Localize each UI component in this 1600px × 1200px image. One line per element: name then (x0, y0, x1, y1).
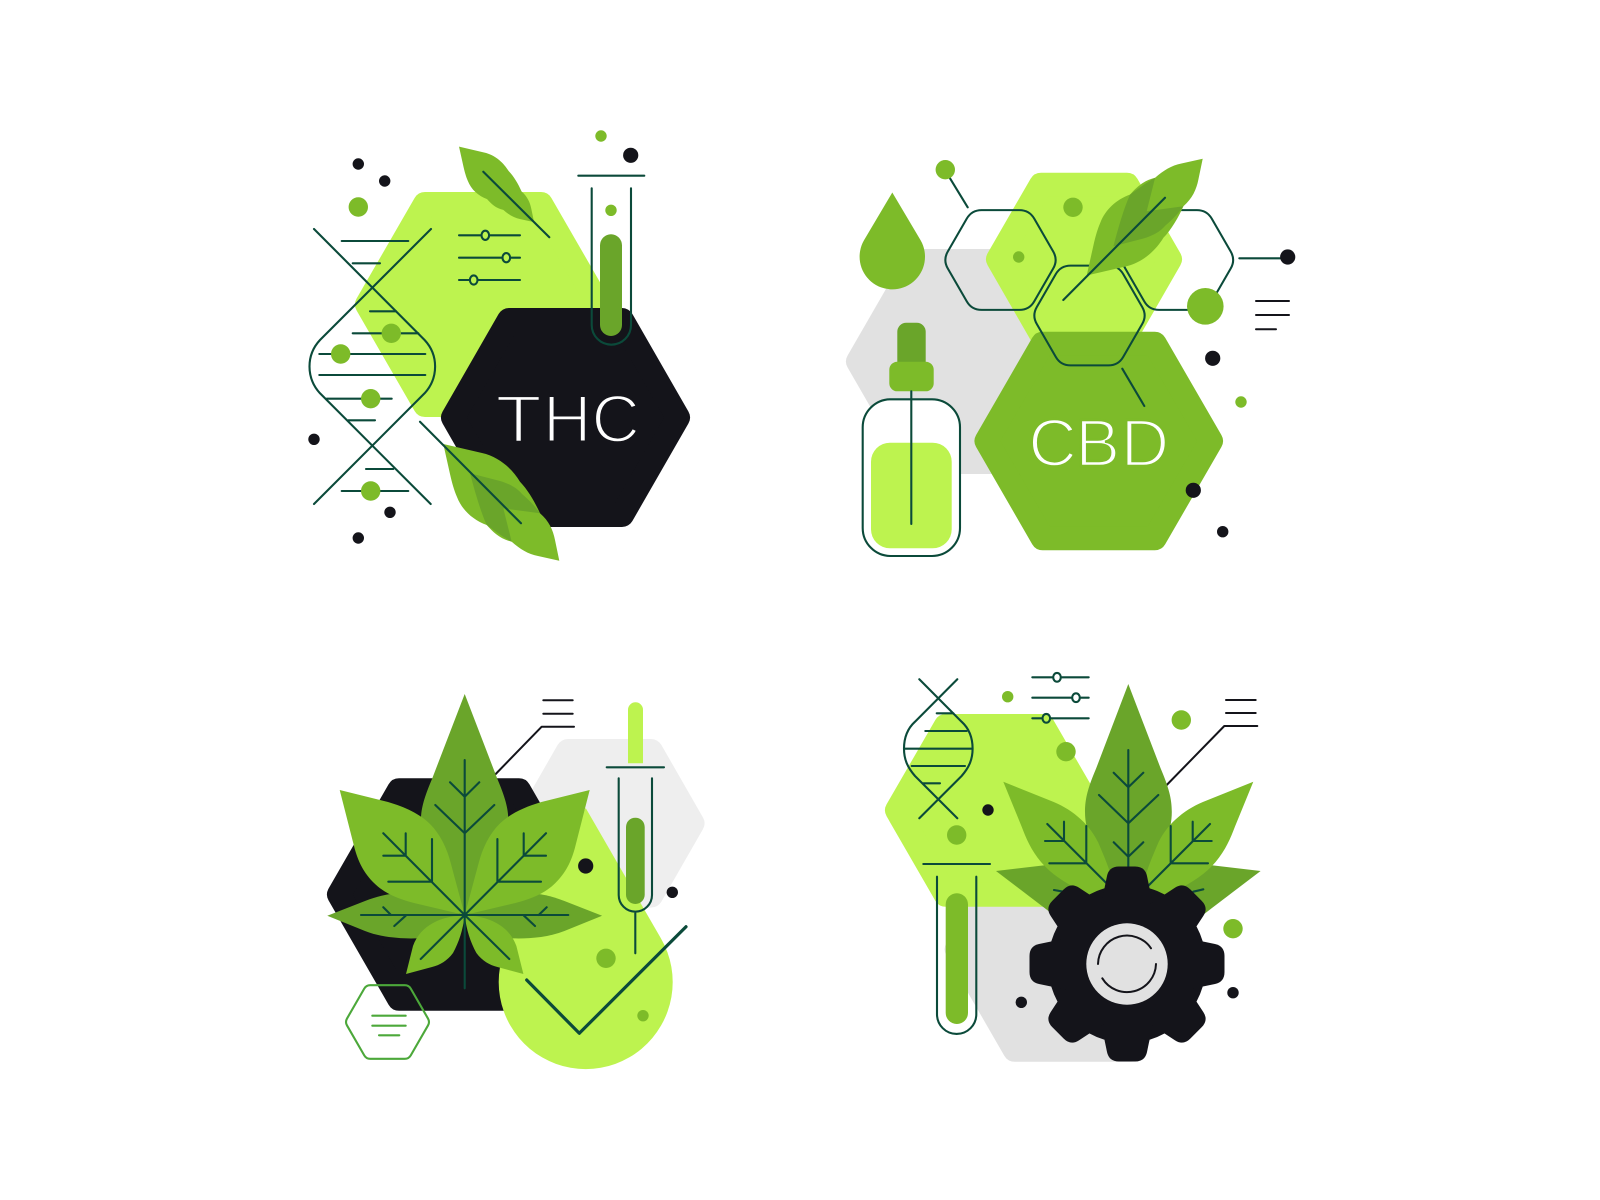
oil drop (860, 192, 925, 289)
callout lines (496, 700, 574, 774)
upper diagonal leaves (340, 790, 590, 915)
top leaf (1085, 684, 1172, 905)
text lines (1256, 301, 1289, 329)
leaf veins (361, 760, 568, 988)
dots on lime (1013, 198, 1083, 263)
dropper bottle (863, 323, 960, 556)
side leaves (996, 865, 1261, 920)
lime hexagon (897, 726, 1092, 895)
small green dot (1235, 396, 1247, 408)
callout lines (1167, 700, 1257, 785)
connector lines (950, 178, 1280, 406)
panel: cannabis leaf check (327, 694, 692, 1069)
gear (1030, 866, 1224, 1062)
grey hexagon (858, 261, 1090, 462)
black hexagon (453, 320, 678, 515)
DNA helix (310, 229, 435, 504)
molecule outline: middle hexagon (1034, 266, 1145, 365)
dots (947, 691, 1243, 1008)
lime drop (499, 808, 673, 1069)
panel: plant and gear (897, 673, 1261, 1062)
black dots (1186, 249, 1295, 537)
diagonal leaves (1003, 782, 1253, 905)
check mark (527, 927, 686, 1033)
panel: THC (308, 130, 678, 561)
test tube (578, 176, 644, 345)
lime hexagon (998, 185, 1170, 334)
THC label (496, 382, 640, 457)
lime hexagon (367, 204, 599, 405)
top leaf (421, 694, 508, 915)
side leaves (327, 893, 602, 938)
small green node (936, 160, 955, 179)
grey hexagon (957, 849, 1189, 1050)
THC label: HC (543, 382, 640, 457)
molecule outline: left hexagon (945, 210, 1056, 310)
dots (578, 858, 678, 1021)
test tube (923, 864, 990, 1034)
black hexagon (339, 790, 579, 999)
bottom leaf (420, 422, 559, 561)
sliders (459, 231, 520, 285)
DNA helix (904, 679, 973, 818)
THC label: T (496, 382, 542, 457)
DNA dots (331, 130, 617, 501)
lower small leaves (406, 915, 523, 974)
test tube (607, 702, 664, 953)
leaf veins (1045, 750, 1212, 892)
sliders (1032, 673, 1089, 723)
small outlined hexagon with lines (346, 985, 429, 1059)
top leaf (459, 147, 549, 237)
panel: CBD (858, 159, 1295, 556)
green hexagon (986, 344, 1211, 538)
large green node (1187, 288, 1224, 325)
black dots (308, 148, 638, 544)
leaf (1063, 159, 1203, 300)
light grey hexagon (526, 751, 692, 896)
molecule outline: right hexagon (1123, 210, 1233, 310)
CBD label: CBD (1028, 406, 1169, 481)
